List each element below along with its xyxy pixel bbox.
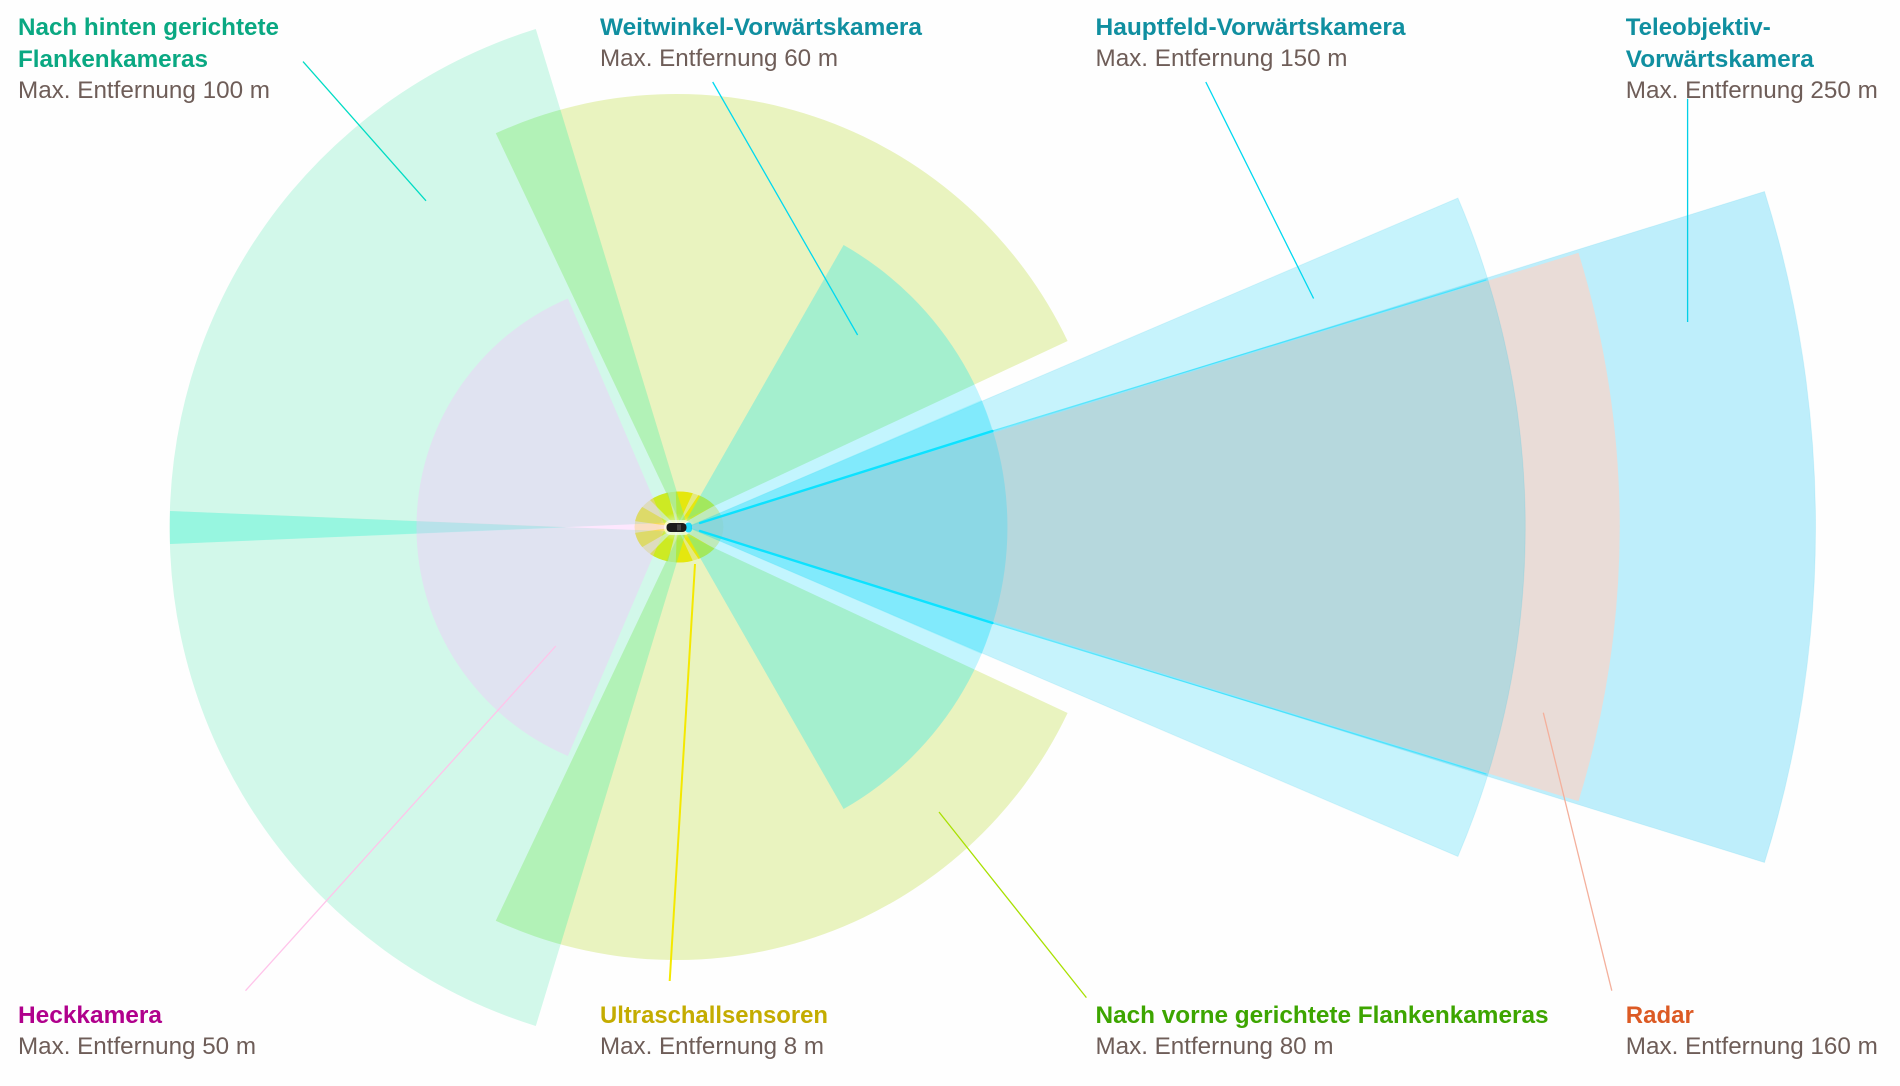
- sector: forward side camera upper: [496, 94, 1068, 522]
- sector: forward side camera lower: [496, 532, 1068, 960]
- ultrasonic sensors: [634, 492, 724, 562]
- sector: radar: [687, 253, 1620, 801]
- sector: rear side cameras overlap: [170, 511, 566, 544]
- sector: rear camera: [416, 298, 666, 756]
- sector: main forward camera: [687, 198, 1525, 856]
- label: rear side cameras: Nach hinten gerichtete: [18, 14, 279, 41]
- overlap tint: rear side and forward side cameras: [496, 110, 685, 944]
- sector: rear side camera upper: [170, 29, 686, 544]
- leader line: forward side cameras: [939, 812, 1086, 998]
- sector: rear side camera lower: [170, 511, 686, 1026]
- label: wide forward camera: Max. Entfernung 60 m: [600, 45, 838, 72]
- cyan strips along the radar edges: [700, 280, 1486, 774]
- icon: car: [664, 520, 692, 535]
- label: forward side cameras: Nach vorne gerichtete Flankenkameras: [1096, 1002, 1548, 1029]
- label: rear camera: Max. Entfernung 50 m: [18, 1033, 256, 1060]
- overlap tint: wide forward and forward side cameras: [688, 245, 974, 809]
- leader line: rear camera: [246, 646, 556, 991]
- label: rear side cameras: Max. Entfernung 100 m: [18, 77, 270, 104]
- label: ultrasonic sensors: Ultraschallsensoren: [600, 1002, 828, 1029]
- label: rear camera: [18, 1002, 256, 1060]
- label: ultrasonic sensors: [600, 1002, 828, 1060]
- label: wide forward camera: Weitwinkel-Vorwärtskamera: [600, 14, 923, 41]
- label: forward side cameras: [1096, 1002, 1548, 1060]
- sector: wide forward camera: [682, 245, 1007, 809]
- leader line: main forward camera: [1206, 82, 1314, 298]
- leader line: wide forward camera: [713, 82, 858, 335]
- label: main forward camera: Hauptfeld-Vorwärtskamera: [1096, 14, 1406, 41]
- label: rear side cameras: [18, 14, 279, 104]
- overlap tint: main and wide forward cameras: [687, 400, 992, 654]
- label: forward side cameras: Max. Entfernung 80 m: [1096, 1033, 1334, 1060]
- label: ultrasonic sensors: Max. Entfernung 8 m: [600, 1033, 824, 1060]
- sector: telephoto forward camera: [687, 192, 1816, 862]
- label: telephoto forward camera: [1626, 14, 1878, 104]
- leader line: radar: [1543, 713, 1612, 991]
- leader line: rear side cameras: [303, 62, 426, 201]
- label: telephoto forward camera: Teleobjektiv-: [1626, 14, 1771, 41]
- label: radar: Radar: [1626, 1002, 1694, 1029]
- label: main forward camera: [1096, 14, 1406, 72]
- label: telephoto forward camera: Max. Entfernung 250 m: [1626, 77, 1878, 104]
- label: rear side cameras: Flankenkameras: [18, 46, 208, 73]
- leader line: ultrasonic sensors: [670, 564, 695, 981]
- label: wide forward camera: [600, 14, 923, 72]
- label: telephoto forward camera: Vorwärtskamera: [1626, 46, 1814, 73]
- label: radar: [1626, 1002, 1878, 1060]
- label: main forward camera: Max. Entfernung 150 m: [1096, 45, 1348, 72]
- leader line: telephoto forward camera: [1687, 99, 1689, 322]
- label: radar: Max. Entfernung 160 m: [1626, 1033, 1878, 1060]
- label: rear camera: Heckkamera: [18, 1002, 163, 1029]
